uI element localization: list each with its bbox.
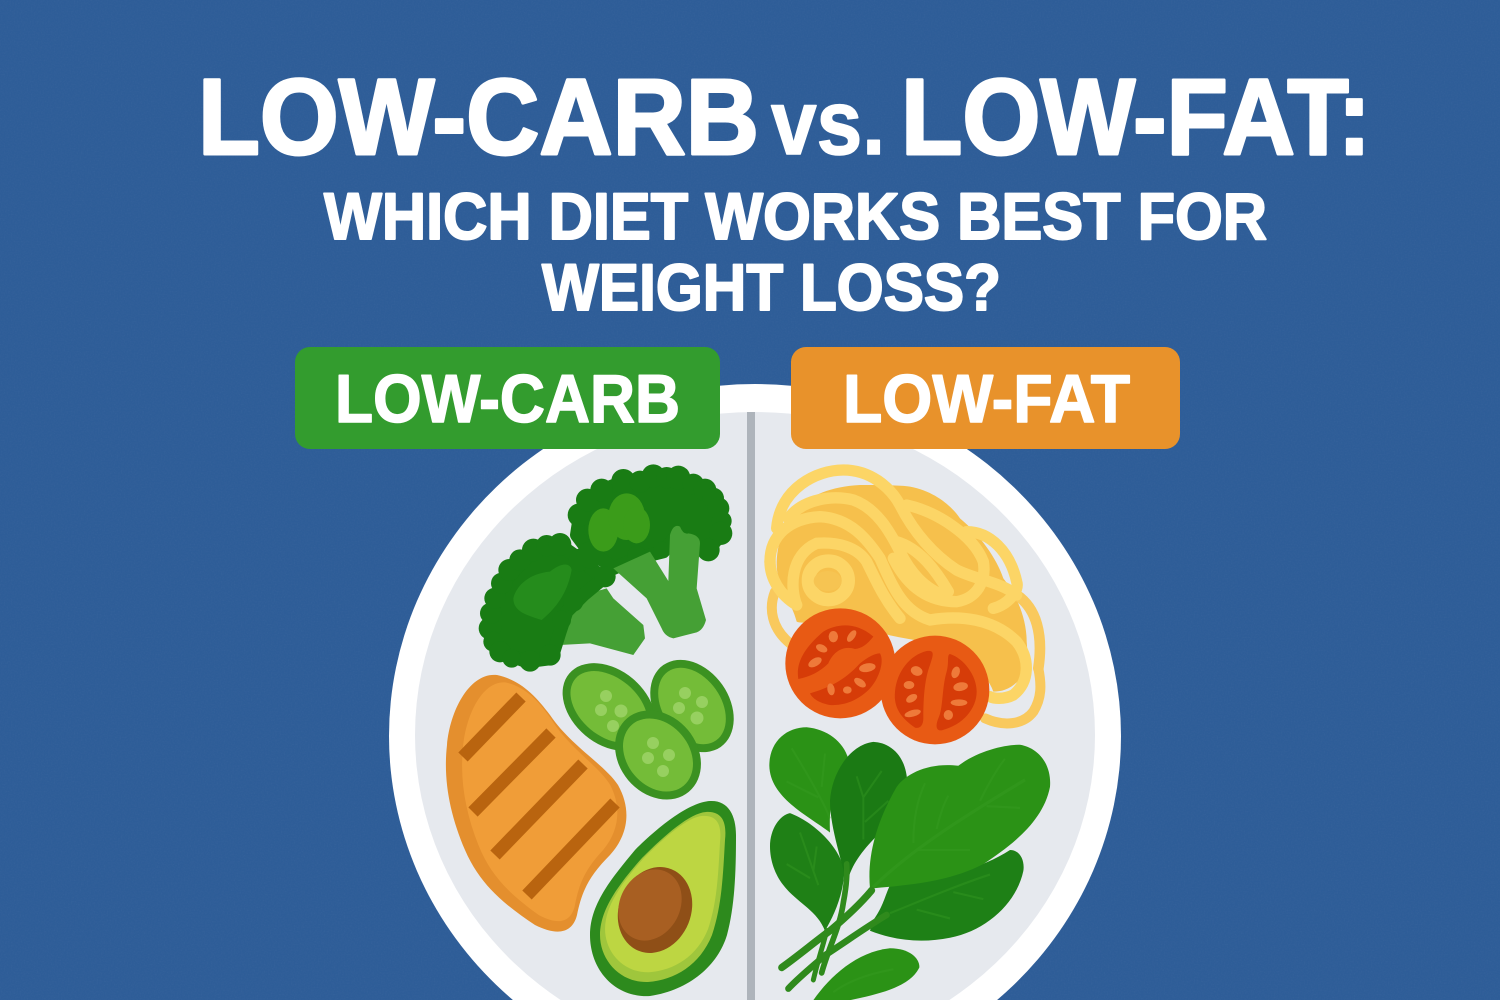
label: low-fat [791, 347, 1180, 449]
title [198, 56, 1371, 324]
avocado [590, 801, 736, 996]
title: LOW-CARB [198, 56, 759, 177]
label: low-fat: LOW-FAT [843, 361, 1130, 437]
title: WHICH DIET WORKS BEST FOR [324, 179, 1267, 253]
label: low-carb [295, 347, 720, 449]
spaghetti [770, 470, 1040, 723]
cucumber slices [562, 660, 734, 800]
tomatoes [785, 608, 989, 744]
label: low-carb: LOW-CARB [335, 361, 680, 437]
plate [389, 384, 1121, 1000]
title: vs. [771, 72, 885, 174]
title: LOW-FAT: [901, 56, 1371, 177]
title: WEIGHT LOSS? [542, 250, 1001, 324]
grilled chicken [446, 675, 626, 932]
broccoli [479, 464, 732, 672]
spinach [769, 727, 1050, 1000]
